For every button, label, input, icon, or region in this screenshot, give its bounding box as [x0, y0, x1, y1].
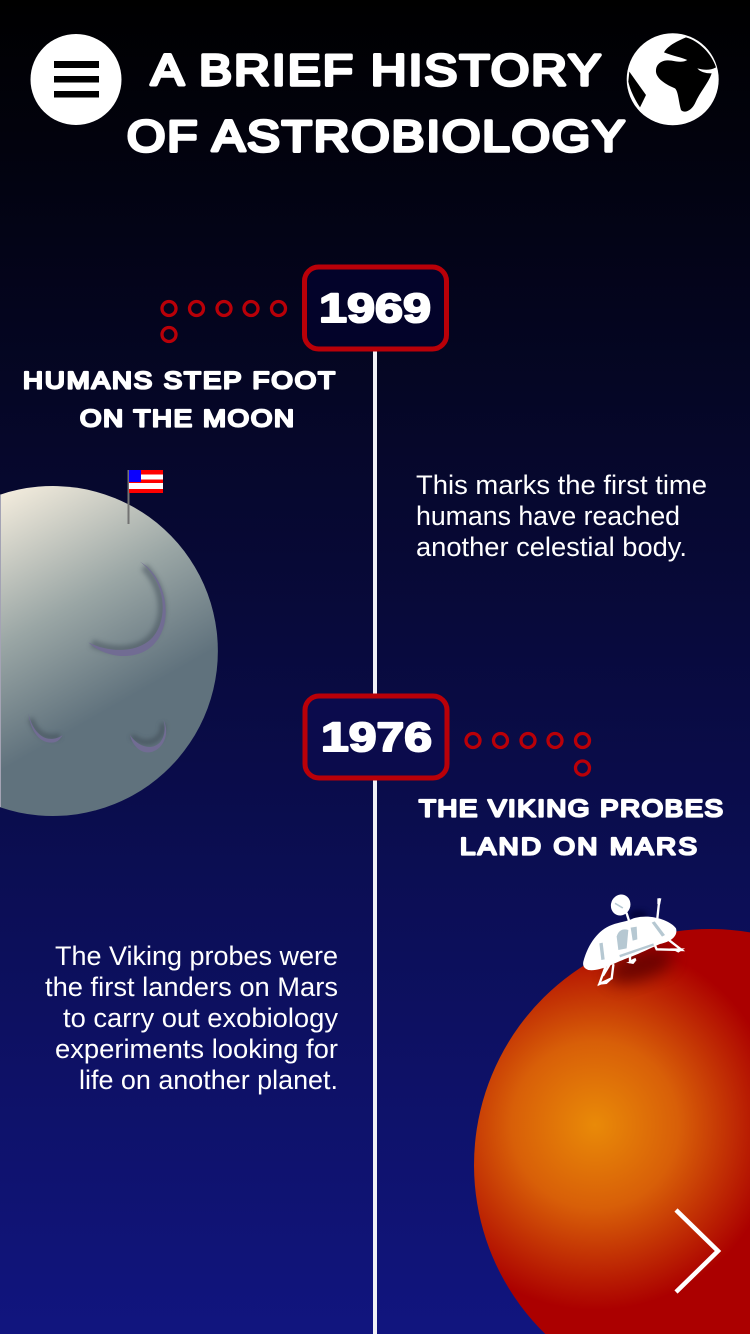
year badge: 1976: 1976	[321, 714, 432, 760]
text block: first time: another celestial body.	[416, 532, 687, 562]
dotted connector: 1969	[162, 302, 286, 342]
illustration: viking lander	[583, 892, 685, 985]
heading: viking probes land on mars	[419, 796, 723, 860]
icon: globe	[627, 33, 719, 125]
title	[127, 45, 625, 160]
text block: viking probes: life on another planet.	[79, 1065, 338, 1095]
icon: menu button	[30, 34, 122, 125]
year badge: 1969	[304, 267, 446, 349]
year badge: 1969: 1969	[319, 285, 431, 331]
text block: first time: This marks the first time	[416, 470, 707, 500]
dotted connector: 1976	[466, 734, 590, 775]
heading: humans step foot on the moon: ON THE MOON	[80, 406, 294, 432]
text block: viking probes: the first landers on Mars	[45, 972, 338, 1002]
craters	[28, 562, 166, 752]
timeline line	[373, 351, 377, 1334]
arrow: next	[676, 1210, 718, 1292]
text block: viking probes: experiments looking for	[55, 1034, 338, 1064]
heading: humans step foot on the moon: HUMANS STEP FOOT	[23, 368, 335, 394]
text block: first time: humans have reached	[416, 501, 680, 531]
heading: humans step foot on the moon	[23, 368, 335, 432]
text block: first time	[416, 470, 707, 562]
title: OF ASTROBIOLOGY	[127, 111, 625, 160]
text block: viking probes: to carry out exobiology	[63, 1003, 338, 1033]
text block: viking probes	[45, 941, 338, 1095]
title: A BRIEF HISTORY	[151, 45, 601, 94]
year badge: 1976	[305, 696, 447, 778]
illustration: moon	[0, 486, 218, 816]
heading: viking probes land on mars: LAND ON MARS	[460, 834, 697, 860]
illustration: mars	[474, 929, 750, 1334]
text block: viking probes: The Viking probes were	[55, 941, 338, 971]
icon: flag	[128, 470, 163, 524]
heading: viking probes land on mars: THE VIKING PROBES	[419, 796, 723, 822]
